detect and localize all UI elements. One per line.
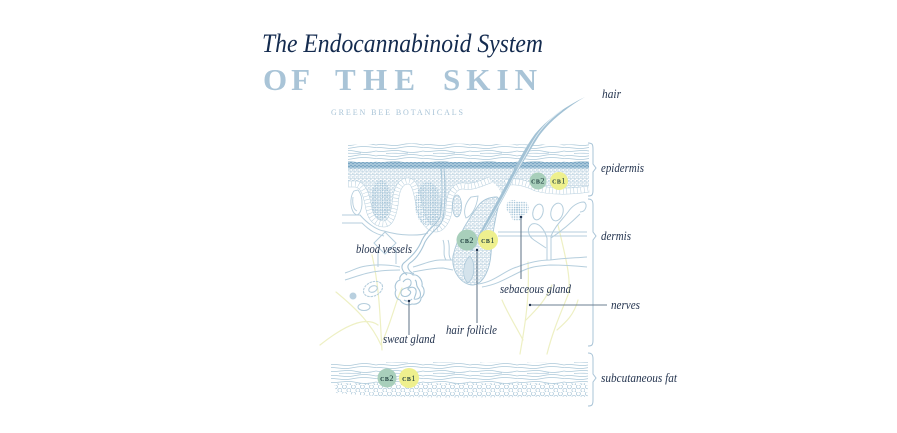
receptors: epidermis: CB2 [531,176,545,186]
subtitle: OF [263,62,310,97]
receptors: fat: CB1 [402,373,416,383]
title: The Endocannabinoid System [262,29,543,58]
illustration: epidermis [348,143,589,232]
illustration: nerves [320,225,578,354]
basal band [348,180,589,229]
labels: hair follicle [446,322,497,337]
receptors: follicle: CB2 [460,235,474,245]
receptors: follicle [456,230,498,250]
labels: dermis [601,228,631,243]
subtitle [263,62,537,97]
dense rete pegs [371,180,391,220]
stratum corneum [348,143,589,163]
subtitle: SKIN [443,62,537,97]
receptors: follicle: CB1 [481,235,495,245]
illustration: blood vessels [342,202,587,287]
subtitle: THE [335,62,415,97]
receptors: epidermis [530,172,568,190]
labels: sweat gland [383,331,435,346]
dark band [348,162,589,168]
brand line: GREEN BEE BOTANICALS [331,108,463,117]
papillae [351,190,362,215]
label brackets [588,143,596,406]
labels: subcutaneous fat [601,370,677,385]
illustration: sebaceous gland [506,200,529,221]
labels [356,86,677,385]
receptors: fat [378,368,419,388]
receptors: fat: CB2 [380,373,394,383]
receptors: epidermis: CB1 [552,176,566,186]
labels: nerves [611,297,640,312]
labels: blood vessels [356,241,412,256]
labels: epidermis [601,160,644,175]
illustration: hair shaft [470,97,585,251]
leader lines [408,216,607,335]
illustration: subcutaneous fat [331,362,588,398]
labels: sebaceous gland [500,281,571,296]
illustration: follicle [453,197,500,285]
labels: hair [602,86,622,101]
illustration: small vessels [350,278,385,310]
cell layers [348,168,589,232]
illustration: sweat gland [395,168,445,305]
